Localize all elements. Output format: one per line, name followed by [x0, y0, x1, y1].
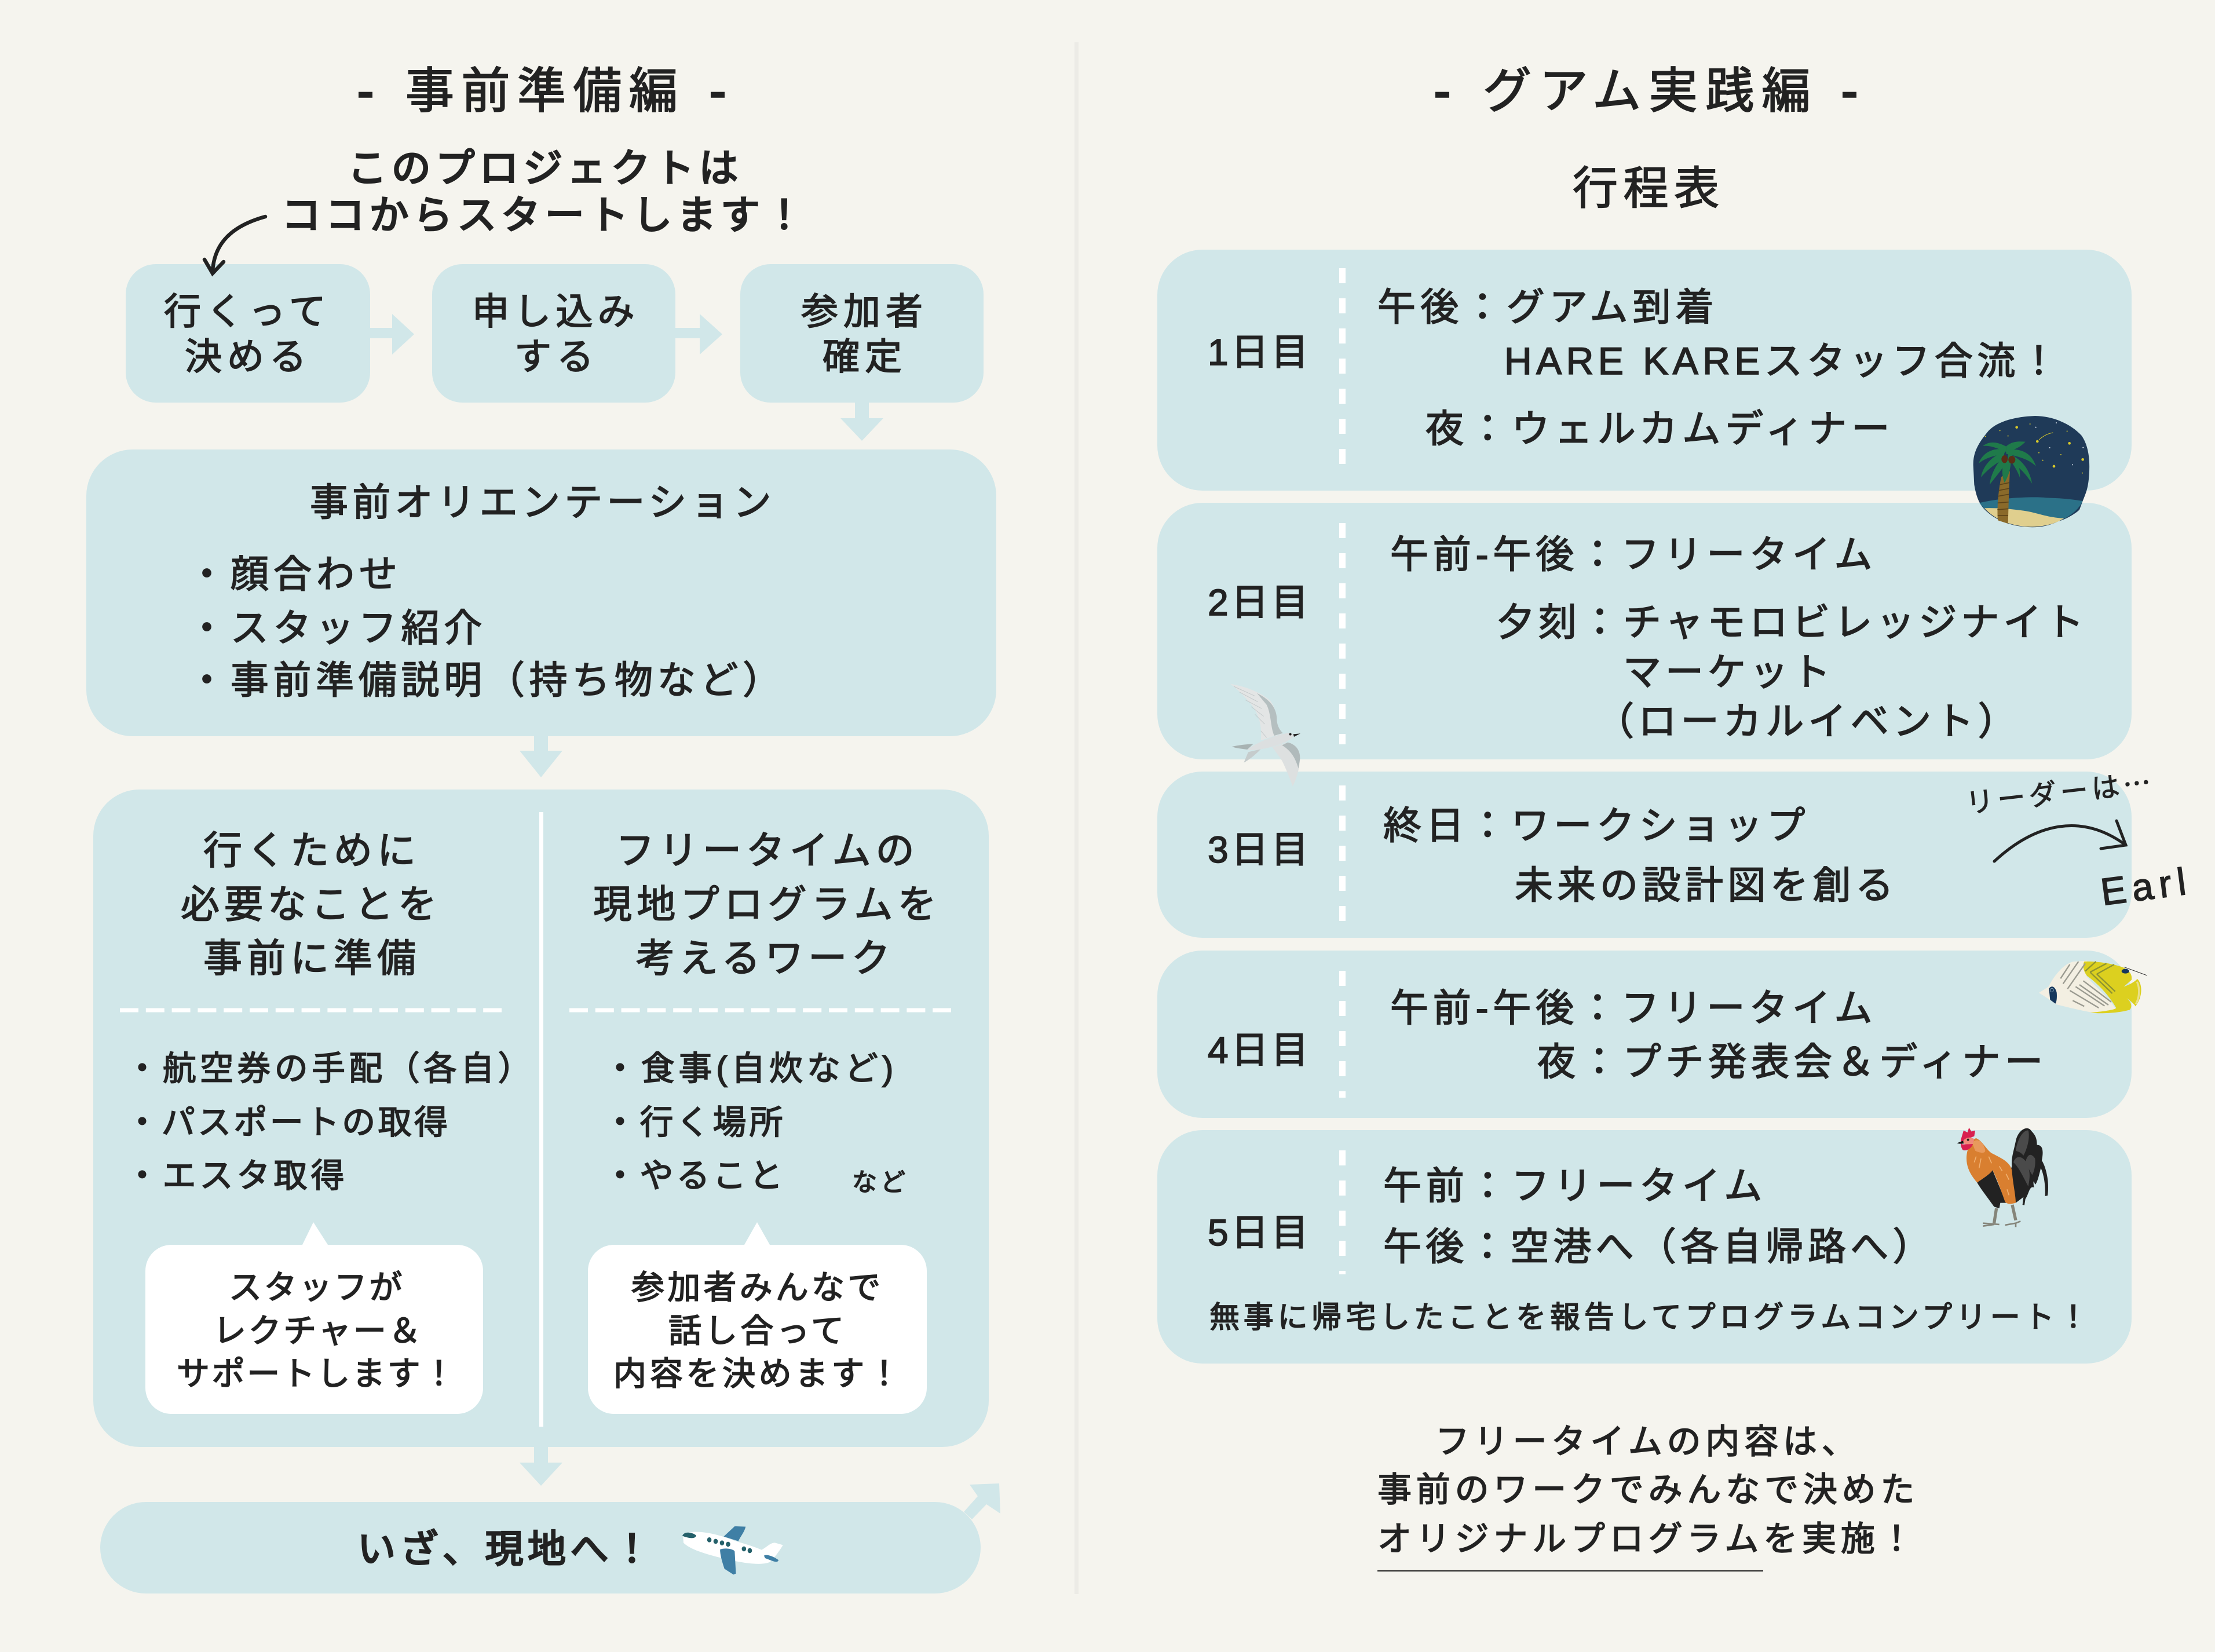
heading: preparation: -	[710, 64, 733, 118]
column: free time workshop	[593, 829, 941, 1197]
step: confirmed: 参加者	[801, 291, 928, 332]
heading: Guam: グアム実践編	[1483, 64, 1818, 118]
row: day 2: 夕刻：チャモロビレッジナイト	[1496, 601, 2088, 644]
icon: airplane	[682, 1526, 783, 1574]
closing note: フリータイムの内容は、	[1435, 1423, 1861, 1461]
column: free time workshop: 現地プログラムを	[593, 883, 941, 927]
row: day 1: 1日目	[1208, 331, 1311, 373]
row: day 4	[1157, 951, 2132, 1118]
arrow: step one to two	[370, 314, 414, 354]
row: day 2: 午前-午後：フリータイム	[1390, 533, 1877, 576]
panel: preparation work	[93, 790, 989, 1447]
callout: staff support: レクチャー＆	[213, 1313, 423, 1350]
panel: orientation: ・顔合わせ	[188, 553, 402, 595]
column: free time workshop: など	[852, 1169, 909, 1197]
row: day 2	[1157, 503, 2132, 759]
panel: orientation	[86, 449, 996, 736]
step: apply	[432, 264, 675, 403]
heading: Guam: -	[1434, 64, 1457, 118]
column: free time workshop: ・行く場所	[604, 1104, 786, 1142]
heading: preparation: 事前準備編	[405, 64, 685, 118]
row: day 1: 午後：グアム到着	[1377, 286, 1719, 328]
arrow: start pointer	[204, 217, 265, 273]
closing note	[1377, 1423, 1919, 1571]
row: day 5: 午後：空港へ（各自帰路へ）	[1383, 1225, 1935, 1268]
column: free time workshop: 考えるワーク	[636, 937, 895, 981]
callout: decide together	[588, 1222, 927, 1414]
row: day 4: 午前-午後：フリータイム	[1390, 986, 1877, 1029]
callout: decide together: 内容を決めます！	[613, 1355, 904, 1392]
panel: orientation: ・スタッフ紹介	[188, 606, 487, 649]
icon: white tern	[1230, 684, 1300, 786]
row: day 2: マーケット	[1623, 650, 1834, 693]
heading: Guam: -	[1841, 64, 1865, 118]
arrow: down to work panel	[520, 736, 562, 777]
step: apply: する	[514, 336, 599, 378]
heading: itinerary: 行程表	[1573, 163, 1725, 214]
column: advance preparation: 必要なことを	[181, 883, 441, 927]
column: advance preparation: ・航空券の手配（各自）	[125, 1050, 535, 1088]
closing note: 事前のワークでみんなで決めた	[1377, 1471, 1919, 1509]
row: day 3	[1157, 772, 2132, 938]
row: day 5	[1157, 1130, 2132, 1364]
arrow: down to departure	[520, 1447, 562, 1486]
row: day 3: 終日：ワークショップ	[1383, 804, 1810, 847]
step: decide to go: 行くって	[164, 291, 331, 332]
icon: night beach with palm	[1973, 416, 2089, 527]
panel: orientation: ・事前準備説明（持ち物など）	[188, 659, 785, 701]
step: confirmed	[740, 264, 984, 403]
start caption: ココからスタートします！	[282, 193, 809, 237]
arrow: up-right takeoff	[964, 1483, 1000, 1519]
column: free time workshop: ・やること	[604, 1157, 786, 1195]
column: advance preparation: ・エスタ取得	[125, 1157, 348, 1195]
row: day 5: 5日目	[1208, 1212, 1311, 1253]
panel: Guam itinerary (right column)	[1157, 64, 2194, 1571]
row: day 3: 未来の設計図を創る	[1515, 864, 1898, 907]
panel: departure	[100, 1502, 981, 1593]
arrow: step two to three	[675, 314, 722, 354]
row: day 4: 4日目	[1208, 1029, 1311, 1071]
step: decide to go	[126, 264, 370, 403]
column: advance preparation: ・パスポートの取得	[125, 1104, 450, 1142]
row: day 1: HARE KAREスタッフ合流！	[1504, 339, 2062, 382]
panel: preparation flow (left column)	[86, 64, 1000, 1593]
row: day 5: 無事に帰宅したことを報告してプログラムコンプリート！	[1209, 1301, 2092, 1335]
annotation: leader	[1964, 759, 2194, 913]
callout: staff support: サポートします！	[177, 1355, 458, 1392]
callout: staff support: スタッフが	[229, 1269, 404, 1306]
annotation: leader: リーダーは…	[1964, 759, 2156, 821]
row: day 5: 午前：フリータイム	[1383, 1164, 1767, 1207]
step: decide to go: 決める	[185, 336, 312, 378]
row: day 1	[1157, 250, 2132, 491]
start caption	[282, 147, 809, 237]
row: day 4: 夜：プチ発表会＆ディナー	[1537, 1040, 2048, 1083]
step: apply: 申し込み	[472, 291, 639, 332]
callout: staff support	[145, 1222, 483, 1414]
column: free time workshop: ・食事(自炊など)	[604, 1050, 897, 1088]
icon: butterflyfish	[2039, 961, 2147, 1013]
row: day 3: 3日目	[1208, 829, 1311, 871]
column: free time workshop: フリータイムの	[616, 829, 919, 873]
arrow: down to orientation	[840, 403, 883, 441]
row: day 2: （ローカルイベント）	[1596, 700, 2020, 743]
column: advance preparation: 行くために	[203, 829, 421, 873]
row: day 1: 夜：ウェルカムディナー	[1426, 407, 1895, 450]
row: day 2: 2日目	[1208, 582, 1311, 623]
panel: departure: いざ、現地へ！	[357, 1527, 656, 1570]
column: advance preparation	[125, 829, 535, 1195]
panel: orientation: 事前オリエンテーション	[310, 481, 776, 524]
column: advance preparation: 事前に準備	[203, 937, 421, 981]
callout: decide together: 参加者みんなで	[631, 1269, 883, 1306]
heading: preparation: -	[357, 64, 381, 118]
annotation: leader: Earl	[2098, 859, 2194, 913]
closing note: オリジナルプログラムを実施！	[1377, 1520, 1918, 1558]
icon: rooster	[1957, 1128, 2048, 1227]
step: confirmed: 確定	[823, 336, 907, 378]
start caption: このプロジェクトは	[348, 147, 743, 191]
callout: decide together: 話し合って	[668, 1313, 847, 1350]
